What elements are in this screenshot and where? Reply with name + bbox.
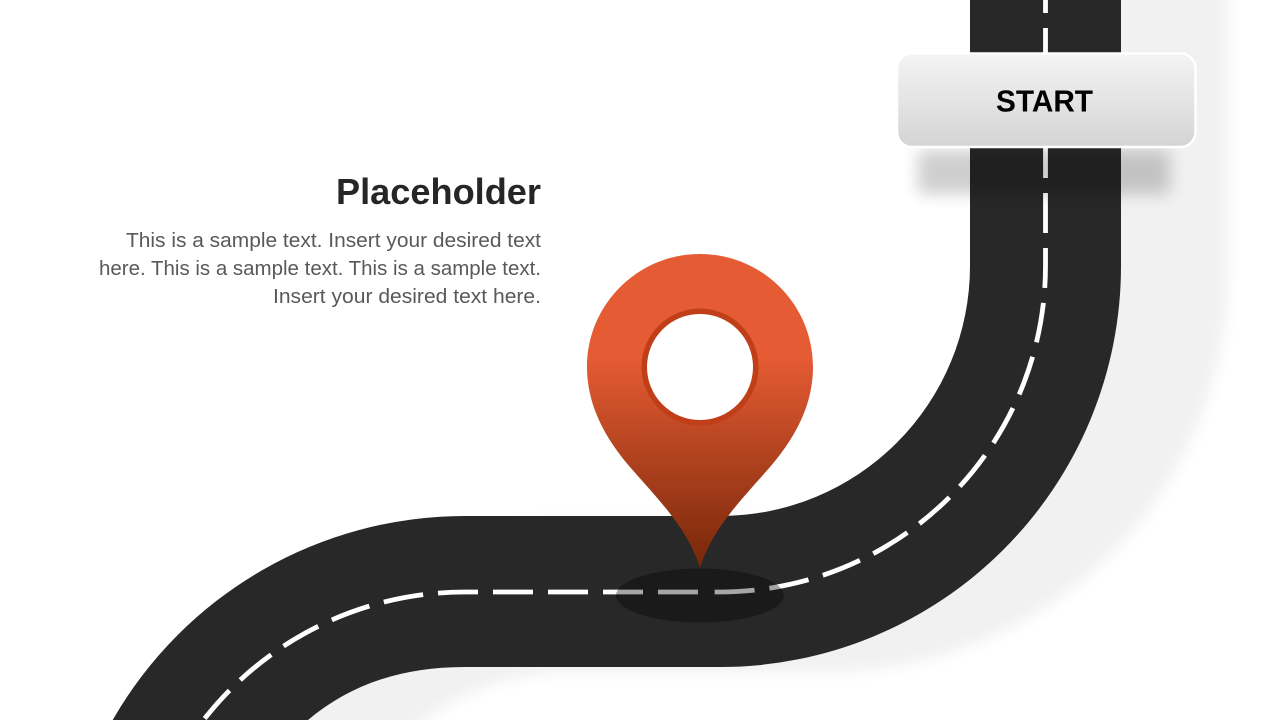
winding road — [113, 0, 1121, 720]
pin ring — [642, 308, 758, 426]
road shadow — [160, 0, 1046, 675]
button label: START — [996, 84, 1093, 118]
heading: Placeholder — [336, 171, 541, 212]
line 1: This is a sample text. Insert your desired text — [126, 230, 541, 252]
pin hole — [647, 314, 753, 420]
start button shadow — [918, 150, 1170, 194]
map pin icon — [587, 254, 813, 568]
line 2: here. This is a sample text. This is a sample text. — [99, 258, 541, 280]
road centre dashes: upper section — [713, 0, 1046, 592]
line 3: Insert your desired text here. — [273, 286, 541, 308]
pin ground shadow — [616, 568, 784, 622]
road centre dashes: lower section — [205, 592, 713, 718]
pin body — [587, 254, 813, 568]
road surface — [113, 0, 1121, 720]
start button — [897, 54, 1196, 147]
body text — [99, 230, 541, 308]
button body — [897, 54, 1196, 147]
